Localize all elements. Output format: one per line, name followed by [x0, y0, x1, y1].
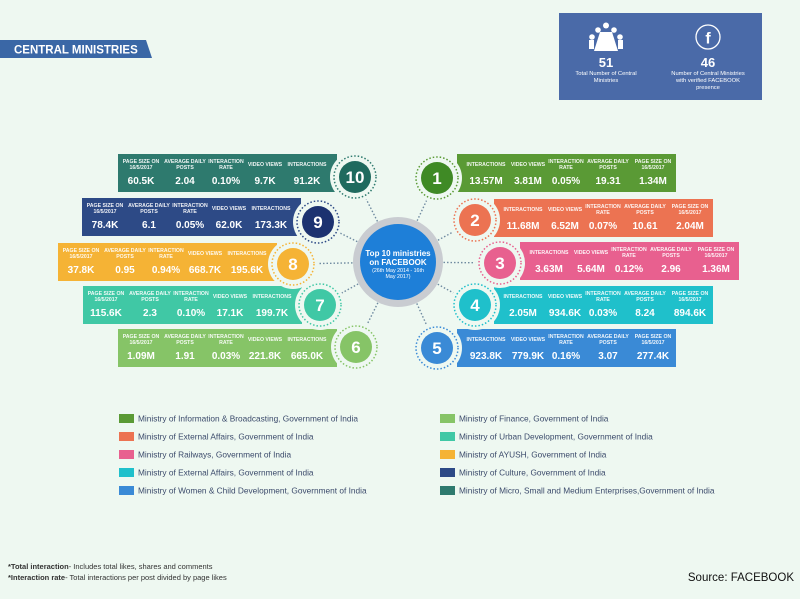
title [0, 40, 152, 58]
bar 2: POSTS [636, 210, 654, 216]
legend: Ministry of External Affairs, Government of India [138, 468, 314, 478]
bar 9: 78.4K [92, 220, 119, 231]
bar 9: INTERACTION [172, 203, 208, 209]
bar 7: 0.10% [177, 308, 205, 319]
legend: Ministry of Micro, Small and Medium Enterprises,Government of India [459, 486, 715, 496]
rank circles: 3 [495, 254, 505, 273]
icon: meeting table [589, 22, 623, 51]
bar 3: 2.96 [661, 264, 681, 275]
stat: 46: 46 [701, 55, 715, 70]
rank circles: 4 [470, 296, 480, 315]
footnotes [8, 562, 227, 582]
bar 4: 2.05M [509, 308, 537, 319]
bar 8: 16/5/2017 [69, 254, 93, 260]
bar 1: VIDEO VIEWS [511, 162, 546, 168]
bar 1: INTERACTIONS [467, 162, 506, 168]
bar 9: 16/5/2017 [93, 209, 117, 215]
bar 6: RATE [219, 340, 233, 346]
stat: 51: 51 [599, 55, 613, 70]
bar 10: 9.7K [254, 176, 276, 187]
bar 7: PAGE SIZE ON [88, 291, 125, 297]
bar 2 [494, 199, 713, 237]
bar 5: 0.16% [552, 351, 580, 362]
legend [119, 414, 715, 496]
legend: Ministry of Information & Broadcasting, Government of India [138, 414, 358, 424]
bar 3: INTERACTIONS [530, 250, 569, 256]
bar 5: 923.8K [470, 351, 503, 362]
bar 3: RATE [622, 253, 636, 259]
rank circles [268, 152, 525, 373]
bar 4: INTERACTIONS [504, 294, 543, 300]
stat: 46: presence [696, 85, 720, 91]
bar 2: INTERACTION [585, 204, 621, 210]
bar 2: VIDEO VIEWS [548, 207, 583, 213]
legend: Ministry of Urban Development, Government of India [459, 432, 653, 442]
bar 9: VIDEO VIEWS [212, 206, 247, 212]
bar 3: 3.63M [535, 264, 563, 275]
bar 5: PAGE SIZE ON [635, 334, 672, 340]
legend: Ministry of Railways, Government of India [138, 450, 291, 460]
bar 7: AVERAGE DAILY [129, 291, 171, 297]
bar 6: POSTS [176, 340, 194, 346]
bar 2: RATE [596, 210, 610, 216]
bar 10: INTERACTION [208, 159, 244, 165]
rank circles: 1 [432, 169, 442, 188]
legend: Ministry of External Affairs, Government of India [138, 432, 314, 442]
bar 8: INTERACTION [148, 248, 184, 254]
rank circles: 8 [288, 255, 298, 274]
bar 6: INTERACTIONS [288, 337, 327, 343]
bar 3: 16/5/2017 [704, 253, 728, 259]
bar 1: 19.31 [595, 176, 621, 187]
stat: 51 [575, 55, 637, 84]
rank circles: 5 [432, 339, 442, 358]
stat: 46 [671, 55, 745, 91]
bar 7: 115.6K [90, 308, 123, 319]
bar 1 [457, 154, 676, 192]
bar 6: PAGE SIZE ON [123, 334, 160, 340]
bar 7 [83, 286, 302, 324]
bar 5: 16/5/2017 [641, 340, 665, 346]
bar 4: POSTS [636, 297, 654, 303]
bar 9: POSTS [140, 209, 158, 215]
bar 9: 0.05% [176, 220, 204, 231]
center circle: May 2017) [385, 274, 411, 280]
bar 5: RATE [559, 340, 573, 346]
bar 5: 3.07 [598, 351, 618, 362]
bar 5: AVERAGE DAILY [587, 334, 629, 340]
bar 4: 0.03% [589, 308, 617, 319]
bar 4: AVERAGE DAILY [624, 291, 666, 297]
bar 8: AVERAGE DAILY [104, 248, 146, 254]
bar 2: 11.68M [507, 221, 539, 232]
icon: facebook [696, 25, 720, 49]
stat: 46: Number of Central Ministries [671, 71, 745, 77]
bar 5 [457, 329, 676, 367]
bar 8: 0.95 [115, 265, 135, 276]
source: Source: FACEBOOK [688, 572, 794, 584]
footnotes: *Interaction rate- Total interactions per post divided by page likes [8, 573, 227, 582]
bar 1: 3.81M [514, 176, 542, 187]
bar 8: PAGE SIZE ON [63, 248, 100, 254]
connectors [293, 177, 500, 348]
bar 5: 277.4K [637, 351, 670, 362]
bar 8: RATE [159, 254, 173, 260]
bar 10: 91.2K [294, 176, 321, 187]
bar 3: VIDEO VIEWS [574, 250, 609, 256]
bar 9: AVERAGE DAILY [128, 203, 170, 209]
bar 4: RATE [596, 297, 610, 303]
bar 4: PAGE SIZE ON [672, 291, 709, 297]
rank circles: 6 [351, 338, 361, 357]
bar 10: 0.10% [212, 176, 240, 187]
bar 2: AVERAGE DAILY [624, 204, 666, 210]
bar 8: POSTS [116, 254, 134, 260]
legend: Ministry of Finance, Government of India [459, 414, 609, 424]
title: CENTRAL MINISTRIES [14, 44, 138, 56]
bar 5: 779.9K [512, 351, 545, 362]
bar 7: INTERACTION [173, 291, 209, 297]
bar 1: POSTS [599, 165, 617, 171]
bar 3: 5.64M [577, 264, 605, 275]
bar 6: VIDEO VIEWS [248, 337, 283, 343]
bar 8 [58, 243, 277, 281]
bar 3: AVERAGE DAILY [650, 247, 692, 253]
bar 3 [520, 242, 739, 280]
bar 9: 62.0K [216, 220, 243, 231]
bar 6: 1.91 [175, 351, 195, 362]
bar 2: 16/5/2017 [678, 210, 702, 216]
center circle [353, 217, 443, 307]
bar 1: 1.34M [639, 176, 667, 187]
bar 8: VIDEO VIEWS [188, 251, 223, 257]
bar 8: 668.7K [189, 265, 222, 276]
bar 6: AVERAGE DAILY [164, 334, 206, 340]
bar 1: 13.57M [469, 176, 503, 187]
bar 4: 8.24 [635, 308, 655, 319]
bar 6: 1.09M [127, 351, 155, 362]
bar 5: INTERACTION [548, 334, 584, 340]
bar 1: AVERAGE DAILY [587, 159, 629, 165]
bar 7: 16/5/2017 [94, 297, 118, 303]
bar 3: 0.12% [615, 264, 643, 275]
bar 6: 0.03% [212, 351, 240, 362]
bar 10: PAGE SIZE ON [123, 159, 160, 165]
bar 9: INTERACTIONS [252, 206, 291, 212]
bar 10: AVERAGE DAILY [164, 159, 206, 165]
bar 3: PAGE SIZE ON [698, 247, 735, 253]
rank circles: 10 [346, 168, 364, 187]
bar 6: 665.0K [291, 351, 324, 362]
bar 7: VIDEO VIEWS [213, 294, 248, 300]
bar 7: 2.3 [143, 308, 157, 319]
bar 2: 2.04M [676, 221, 704, 232]
stat: 51: Total Number of Central [575, 71, 637, 77]
center circle: on FACEBOOK [369, 258, 427, 267]
bar 5: POSTS [599, 340, 617, 346]
bar 10: RATE [219, 165, 233, 171]
bar 3: 1.36M [702, 264, 730, 275]
bar 1: PAGE SIZE ON [635, 159, 672, 165]
bar 6 [118, 329, 337, 367]
bar 10 [118, 154, 337, 192]
bar 4: INTERACTION [585, 291, 621, 297]
bar 10: 2.04 [175, 176, 195, 187]
bar 2: PAGE SIZE ON [672, 204, 709, 210]
bar 6: INTERACTION [208, 334, 244, 340]
rank circles: 9 [313, 213, 323, 232]
bar 1: INTERACTION [548, 159, 584, 165]
footnotes: *Total interaction- Includes total likes, shares and comments [8, 562, 213, 571]
bar 7: RATE [184, 297, 198, 303]
bar 6: 16/5/2017 [129, 340, 153, 346]
bar 2: INTERACTIONS [504, 207, 543, 213]
bar 10: INTERACTIONS [288, 162, 327, 168]
bar 4 [494, 286, 713, 324]
bar 4: VIDEO VIEWS [548, 294, 583, 300]
legend: Ministry of Women & Child Development, Government of India [138, 486, 367, 496]
bar 10: POSTS [176, 165, 194, 171]
stat: 46: with verified FACEBOOK [675, 78, 740, 84]
bar 4: 934.6K [549, 308, 582, 319]
stat: 51: Ministries [594, 78, 618, 84]
bar 9: PAGE SIZE ON [87, 203, 124, 209]
center circle: (26th May 2014 - 16th [372, 268, 424, 274]
bar 7: POSTS [141, 297, 159, 303]
rank circles: 7 [315, 296, 325, 315]
bar 8: 0.94% [152, 265, 180, 276]
bar 3: POSTS [662, 253, 680, 259]
bar 9: 6.1 [142, 220, 156, 231]
bar 1: RATE [559, 165, 573, 171]
bar 2: 6.52M [551, 221, 579, 232]
bar 8: 37.8K [68, 265, 95, 276]
bar 1: 16/5/2017 [641, 165, 665, 171]
bar 8: 195.6K [231, 265, 264, 276]
bar 7: INTERACTIONS [253, 294, 292, 300]
panel: summary box [559, 13, 762, 100]
bar 6: 221.8K [249, 351, 282, 362]
bar 1: 0.05% [552, 176, 580, 187]
bar 2: 10.61 [632, 221, 658, 232]
bar 2: 0.07% [589, 221, 617, 232]
bar 5: INTERACTIONS [467, 337, 506, 343]
bar 3: INTERACTION [611, 247, 647, 253]
bar 7: 199.7K [256, 308, 289, 319]
legend: Ministry of AYUSH, Government of India [459, 450, 607, 460]
bar 8: INTERACTIONS [228, 251, 267, 257]
bar 4: 894.6K [674, 308, 707, 319]
bar 9: RATE [183, 209, 197, 215]
bar 4: 16/5/2017 [678, 297, 702, 303]
center circle: Top 10 ministries [365, 249, 431, 258]
legend: Ministry of Culture, Government of India [459, 468, 606, 478]
bar 10: 60.5K [128, 176, 155, 187]
bar 9: 173.3K [255, 220, 288, 231]
bar 9 [82, 198, 301, 236]
bar 10: 16/5/2017 [129, 165, 153, 171]
bar 7: 17.1K [217, 308, 244, 319]
bar 10: VIDEO VIEWS [248, 162, 283, 168]
rank circles: 2 [470, 211, 480, 230]
bar 5: VIDEO VIEWS [511, 337, 546, 343]
icon: facebook: f [705, 30, 711, 48]
